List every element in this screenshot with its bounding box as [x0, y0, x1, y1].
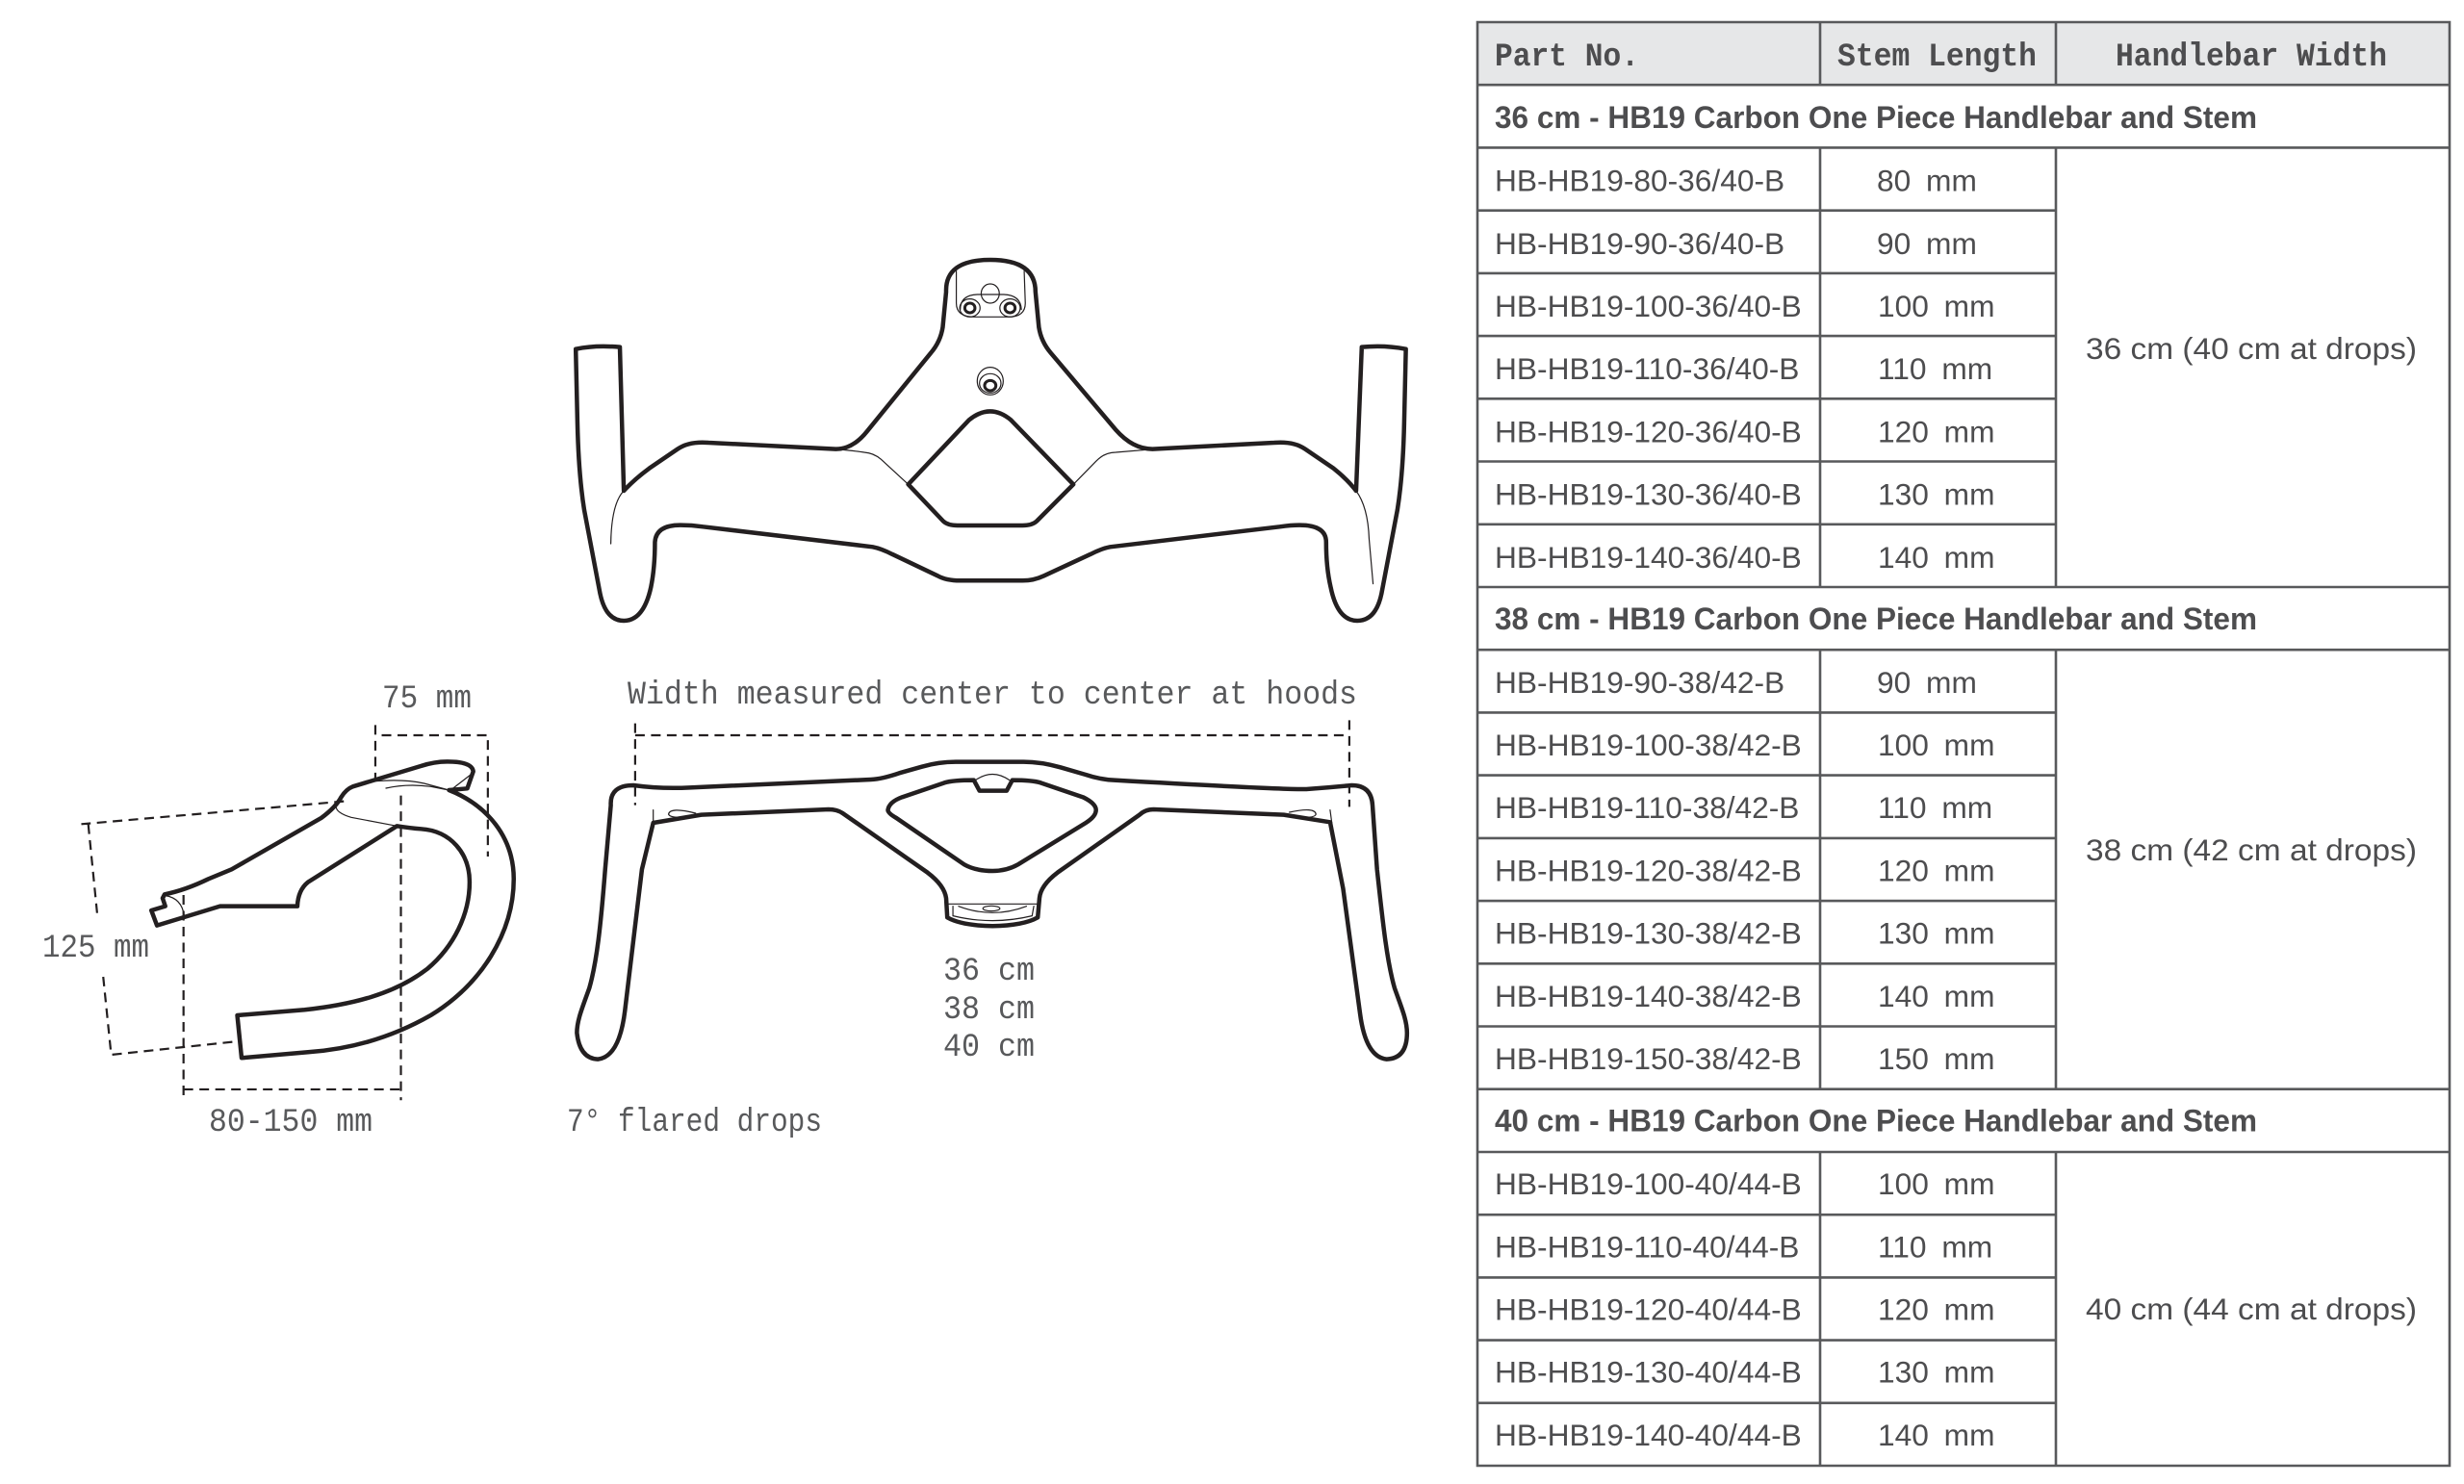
- table column headings: Handlebar Width: [2116, 39, 2387, 76]
- label: width measurement note: Width measured center to center at hoods: [628, 678, 1357, 714]
- table grid lines: [1477, 22, 2450, 1466]
- dashed width dimension: [635, 720, 1349, 806]
- rows: 38 cm handlebar: 110 mm: [1878, 790, 1992, 825]
- thin contour lines: [611, 449, 1373, 584]
- rows: 38 cm handlebar: HB-HB19-120-38/42-B: [1495, 853, 1802, 887]
- rows: 38 cm handlebar: 90 mm: [1877, 665, 1977, 700]
- rows: 38 cm handlebar: HB-HB19-140-38/42-B: [1495, 979, 1802, 1013]
- table column headings: [1495, 39, 2387, 76]
- side profile outline: [151, 761, 514, 1058]
- central opening: [887, 780, 1096, 871]
- table header background: [1477, 22, 2450, 85]
- label: 125 mm: 125 mm: [42, 931, 149, 967]
- label: available widths: 38 cm: [943, 992, 1035, 1029]
- stem cap bolt: [983, 906, 1000, 911]
- rows: 38 cm handlebar: 140 mm: [1878, 979, 1994, 1013]
- rows: 38 cm handlebar: HB-HB19-150-38/42-B: [1495, 1041, 1802, 1076]
- rows: 36 cm handlebar: [1495, 164, 2417, 575]
- rows: 40 cm handlebar: 140 mm: [1878, 1418, 1994, 1452]
- front profile outline: [577, 762, 1407, 1060]
- rows: 36 cm handlebar: 80 mm: [1877, 164, 1977, 198]
- label: 80-150 mm: 80-150 mm: [209, 1105, 372, 1141]
- rows: 40 cm handlebar: 130 mm: [1878, 1355, 1994, 1390]
- rows: 36 cm handlebar: 110 mm: [1878, 351, 1992, 386]
- rows: 36 cm handlebar: 100 mm: [1878, 289, 1994, 323]
- rows: 36 cm handlebar: 90 mm: [1877, 226, 1977, 261]
- rows: 36 cm handlebar: HB-HB19-80-36/40-B: [1495, 164, 1784, 198]
- outline of handlebar and stem, top view: [576, 260, 1406, 621]
- rows: 36 cm handlebar: 120 mm: [1878, 414, 1994, 448]
- rows: 36 cm handlebar: HB-HB19-140-36/40-B: [1495, 540, 1802, 575]
- rows: 40 cm handlebar: 40 cm (44 cm at drops): [2086, 1292, 2417, 1326]
- label: available widths: 36 cm: [943, 954, 1035, 990]
- table column headings: Stem Length: [1837, 39, 2037, 76]
- rows: 38 cm handlebar: HB-HB19-100-38/42-B: [1495, 728, 1802, 762]
- section heading: 36 cm: 36 cm - HB19 Carbon One Piece Handlebar and Stem: [1495, 100, 2257, 135]
- diagram: handlebar side view with dimensions: [81, 725, 514, 1100]
- rows: 38 cm handlebar: 120 mm: [1878, 853, 1994, 887]
- rows: 38 cm handlebar: [1495, 665, 2417, 1076]
- rows: 40 cm handlebar: [1495, 1166, 2417, 1452]
- rows: 40 cm handlebar: HB-HB19-110-40/44-B: [1495, 1229, 1799, 1264]
- section heading: 40 cm: 40 cm - HB19 Carbon One Piece Handlebar and Stem: [1495, 1103, 2257, 1138]
- rows: 36 cm handlebar: 140 mm: [1878, 540, 1994, 575]
- label: flared drops note: 7° flared drops: [567, 1105, 822, 1141]
- rows: 36 cm handlebar: HB-HB19-120-36/40-B: [1495, 414, 1802, 448]
- rows: 40 cm handlebar: HB-HB19-120-40/44-B: [1495, 1292, 1802, 1326]
- rows: 38 cm handlebar: 100 mm: [1878, 728, 1994, 762]
- table: part numbers, stem length and handlebar width: [1477, 22, 2450, 1466]
- rows: 36 cm handlebar: HB-HB19-110-36/40-B: [1495, 351, 1799, 386]
- rows: 38 cm handlebar: HB-HB19-110-38/42-B: [1495, 790, 1799, 825]
- diagram: handlebar front view with width dimension: [577, 720, 1407, 1060]
- rows: 36 cm handlebar: HB-HB19-90-36/40-B: [1495, 226, 1784, 261]
- rows: 36 cm handlebar: 36 cm (40 cm at drops): [2086, 331, 2417, 366]
- label: available widths: [943, 954, 1035, 1066]
- rows: 36 cm handlebar: 130 mm: [1878, 477, 1994, 512]
- section heading: 38 cm: 38 cm - HB19 Carbon One Piece Handlebar and Stem: [1495, 601, 2257, 636]
- rows: 40 cm handlebar: HB-HB19-130-40/44-B: [1495, 1355, 1802, 1390]
- thin contour lines: [166, 775, 471, 916]
- rows: 40 cm handlebar: HB-HB19-100-40/44-B: [1495, 1166, 1802, 1201]
- rows: 40 cm handlebar: HB-HB19-140-40/44-B: [1495, 1418, 1802, 1452]
- rows: 38 cm handlebar: 38 cm (42 cm at drops): [2086, 832, 2417, 867]
- thin contour lines and cable ports: [654, 810, 1332, 823]
- central diamond opening: [909, 411, 1073, 525]
- diagram: handlebar top view: [576, 260, 1406, 621]
- rows: 38 cm handlebar: 130 mm: [1878, 916, 1994, 951]
- rows: 38 cm handlebar: 150 mm: [1878, 1041, 1994, 1076]
- rows: 38 cm handlebar: HB-HB19-90-38/42-B: [1495, 665, 1784, 700]
- label: available widths: 40 cm: [943, 1030, 1035, 1066]
- rows: 40 cm handlebar: 100 mm: [1878, 1166, 1994, 1201]
- label: 75 mm: 75 mm: [382, 681, 472, 718]
- rows: 40 cm handlebar: 120 mm: [1878, 1292, 1994, 1326]
- stem cap detail: [947, 774, 1038, 921]
- faceplate bolts and cover: [957, 271, 1025, 317]
- stem bolt: [977, 368, 1003, 395]
- rows: 38 cm handlebar: HB-HB19-130-38/42-B: [1495, 916, 1802, 951]
- table column headings: Part No.: [1495, 39, 1639, 76]
- rows: 36 cm handlebar: HB-HB19-130-36/40-B: [1495, 477, 1802, 512]
- rows: 40 cm handlebar: 110 mm: [1878, 1229, 1992, 1264]
- rows: 36 cm handlebar: HB-HB19-100-36/40-B: [1495, 289, 1802, 323]
- dashed dimension lines: [81, 725, 488, 1100]
